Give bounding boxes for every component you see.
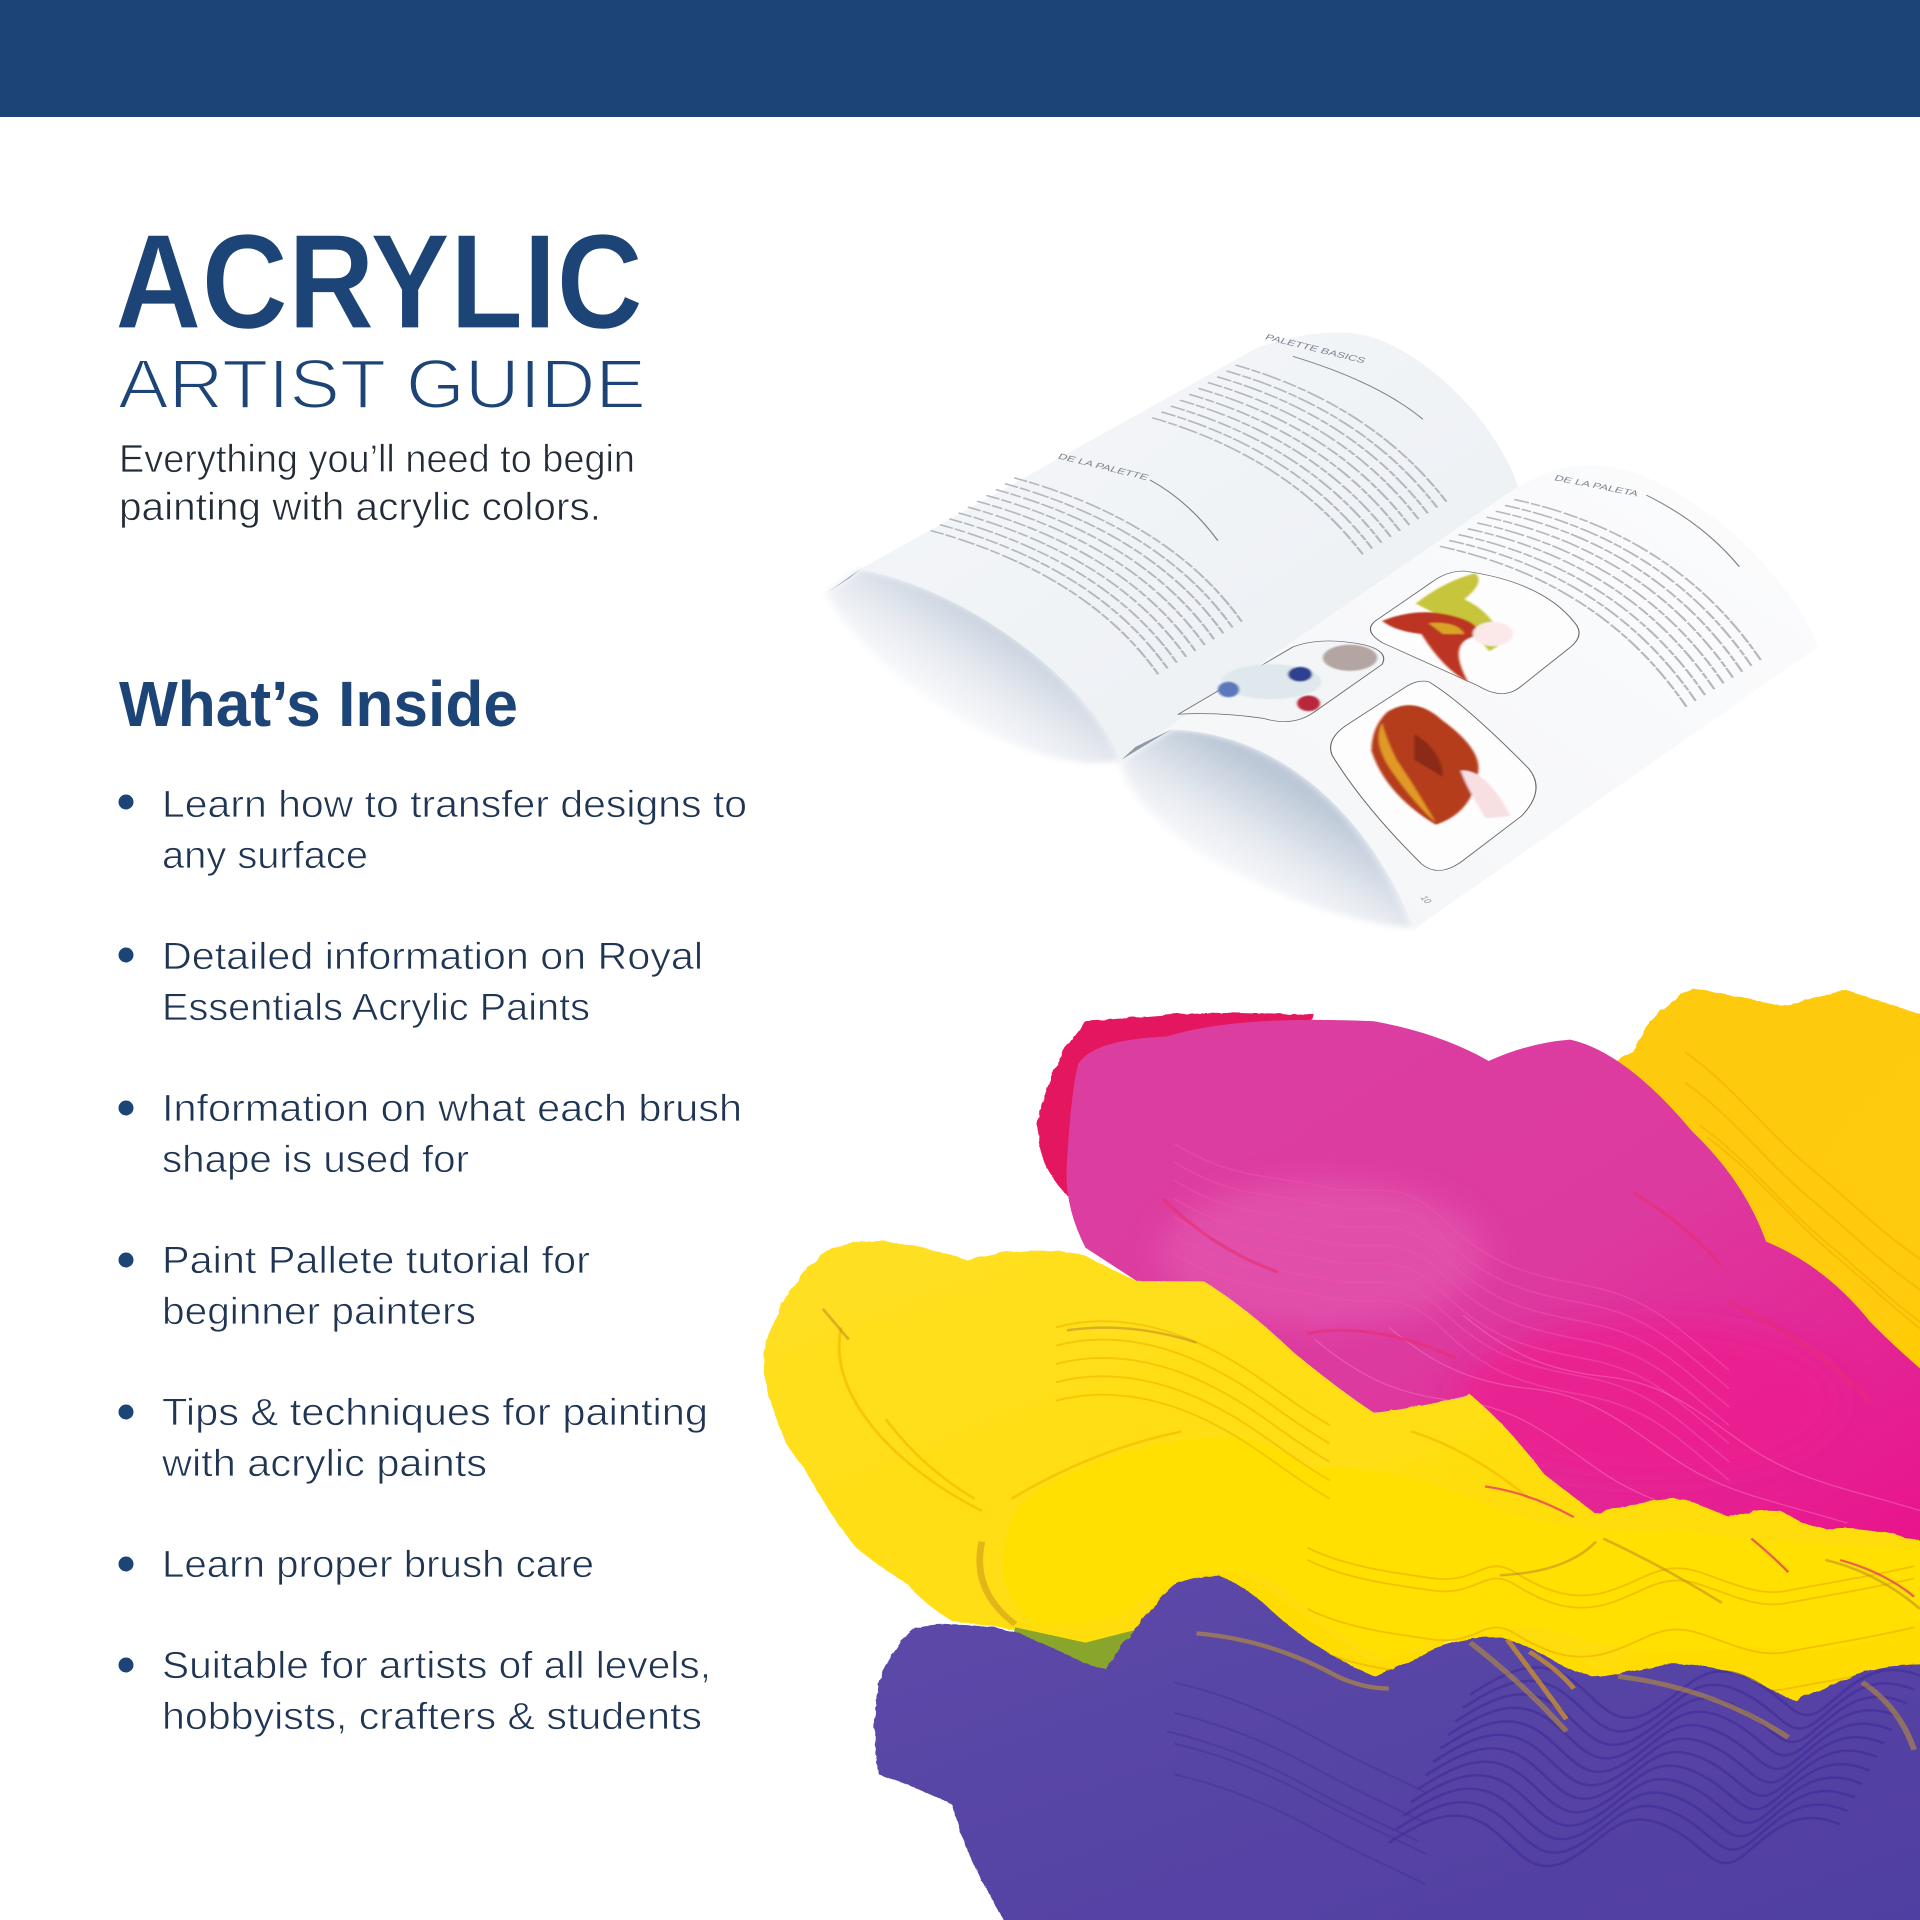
list item: brush care: Learn proper brush care bbox=[162, 1544, 594, 1586]
list item: paints information bbox=[118, 936, 703, 1029]
right page bbox=[1121, 465, 1818, 929]
booklet shadow right bbox=[1121, 729, 1414, 929]
title: ACRYLIC: ACRYLIC bbox=[115, 206, 643, 357]
list item: tips and techniques bbox=[118, 1392, 708, 1485]
crimson underlayer stroke bbox=[1037, 1012, 1315, 1205]
list item: transfer designs bbox=[118, 784, 747, 877]
page number: 10 bbox=[1418, 895, 1434, 905]
booklet shadow left bbox=[827, 569, 1121, 763]
intro text: Everything you’ll need to begin bbox=[119, 438, 635, 481]
heading: What's Inside: What’s Inside bbox=[119, 668, 518, 740]
list item: paints information: Detailed information on Royal bbox=[162, 936, 703, 978]
yellow paint stroke: main bbox=[764, 1241, 1920, 1731]
photo panel: palette dabs bbox=[1179, 641, 1384, 722]
purple paint stroke bbox=[875, 1575, 1920, 1920]
list item: palette tutorial: Paint Pallete tutorial for bbox=[162, 1240, 590, 1282]
list item: suitable for all: hobbyists, crafters & students bbox=[162, 1696, 702, 1738]
list item: tips and techniques: Tips & techniques for painting bbox=[162, 1392, 708, 1434]
list item: palette tutorial bbox=[118, 1240, 590, 1333]
list item: transfer designs: any surface bbox=[162, 835, 368, 877]
list item: palette tutorial: beginner painters bbox=[162, 1291, 476, 1333]
yellow paint stroke: upper right bbox=[1574, 988, 1920, 1389]
open booklet photo bbox=[827, 332, 1818, 929]
list item: brush shapes: Information on what each brush bbox=[162, 1088, 742, 1130]
subtitle: ARTIST GUIDE: ARTIST GUIDE bbox=[118, 345, 646, 423]
list item: transfer designs: Learn how to transfer designs to bbox=[162, 784, 747, 826]
list item: suitable for all: Suitable for artists of all levels, bbox=[162, 1645, 711, 1687]
list item: tips and techniques: with acrylic paints bbox=[161, 1443, 487, 1485]
list item: brush shapes: shape is used for bbox=[162, 1139, 469, 1181]
feature list bbox=[118, 784, 747, 1738]
list item: brush shapes bbox=[118, 1088, 742, 1181]
photo panel: red and yellow paint bbox=[1370, 571, 1579, 694]
green paint sliver bbox=[1012, 1627, 1134, 1676]
intro text: painting with acrylic colors. bbox=[119, 486, 601, 529]
left page: DE LA PALETTE bbox=[1056, 452, 1150, 482]
magenta paint stroke bbox=[1066, 1020, 1920, 1572]
left page bbox=[827, 332, 1518, 760]
intro text bbox=[119, 438, 635, 529]
photo panel: brush in red paint bbox=[1331, 681, 1536, 870]
list item: paints information: Essentials Acrylic Paints bbox=[162, 987, 590, 1029]
paint strokes photo bbox=[764, 988, 1920, 1920]
header band bbox=[0, 0, 1920, 117]
left page: PALETTE BASICS bbox=[1263, 333, 1367, 365]
list item: suitable for all bbox=[118, 1645, 711, 1738]
right page: DE LA PALETA bbox=[1552, 474, 1641, 499]
